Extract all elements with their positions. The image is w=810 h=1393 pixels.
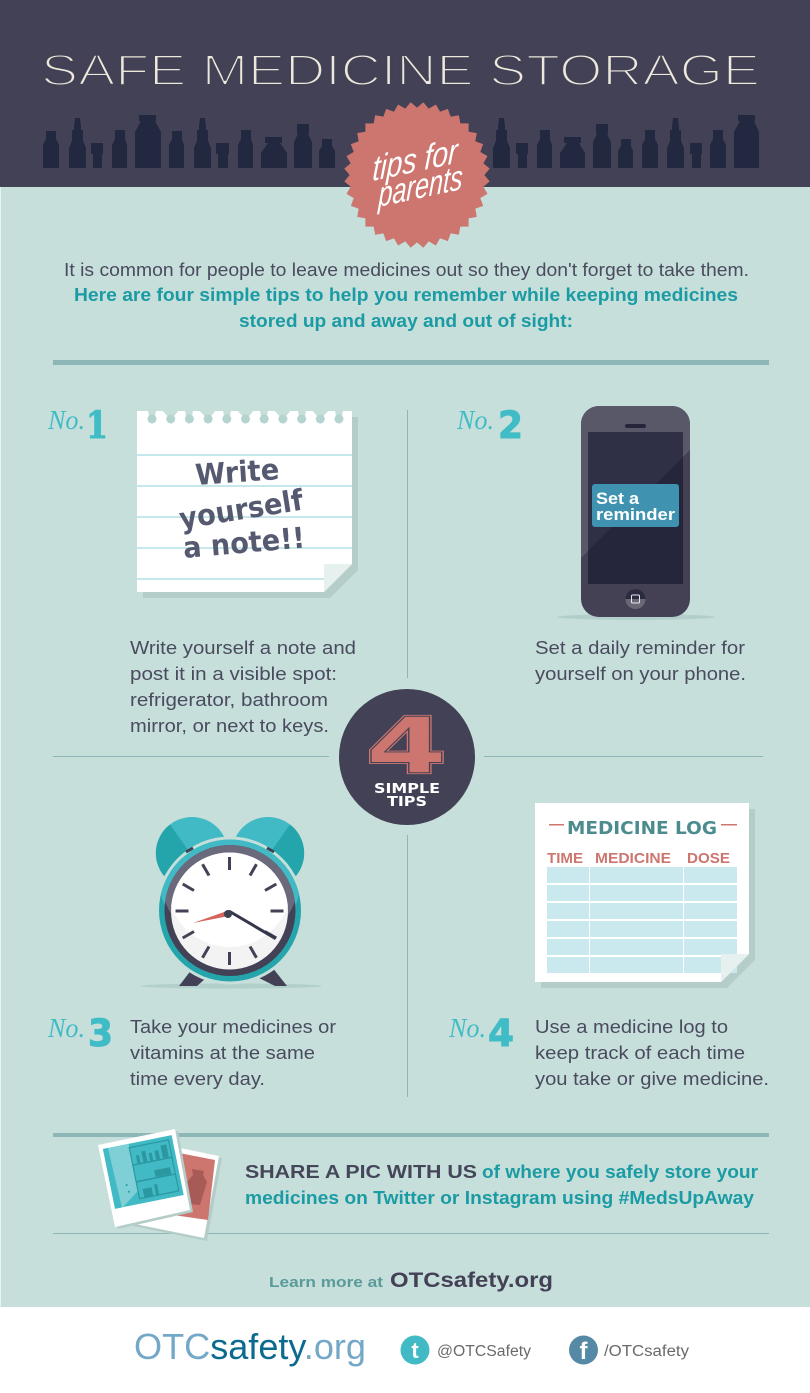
- tip 4 number: [448, 1012, 514, 1055]
- tip 2 text: yourself on your phone.: [535, 664, 746, 684]
- tip 4 text: keep track of each time: [535, 1043, 745, 1063]
- handwritten note text: Write: [194, 452, 280, 492]
- handwritten note text: yourself: [177, 483, 306, 536]
- tip 4 text: you take or give medicine.: [535, 1069, 769, 1089]
- learn more line: [269, 1269, 553, 1292]
- badge: 4 simple tips: 4: [366, 702, 447, 792]
- share call to action: SHARE A PIC WITH US: [245, 1162, 477, 1182]
- tip 1 text: refrigerator, bathroom: [130, 690, 328, 710]
- icon: sticky note: [137, 410, 358, 598]
- badge: tips for parents: tips for: [372, 130, 461, 189]
- badge: 4 simple tips: 4: [366, 702, 447, 792]
- handwritten note text: a note!!: [182, 520, 306, 565]
- tip 1 text: [130, 638, 356, 736]
- tip 2 number: 2: [498, 404, 523, 447]
- reminder button: Set a: [596, 489, 640, 508]
- handwritten note text: [177, 452, 306, 565]
- log columns: TIME: [547, 850, 583, 867]
- badge: tips for parents: [344, 102, 490, 248]
- tip 1 text: post it in a visible spot:: [130, 664, 337, 684]
- reminder button: reminder: [596, 505, 675, 524]
- tip 2 number: No.: [456, 405, 494, 435]
- log columns: DOSE: [687, 850, 730, 867]
- badge: tips for parents: parents: [377, 157, 464, 215]
- tip 1 text: mirror, or next to keys.: [130, 716, 329, 736]
- badge: 4 simple tips: SIMPLE: [374, 782, 440, 797]
- learn more line: OTCsafety.org: [390, 1269, 553, 1292]
- footer: [0, 1307, 810, 1393]
- learn more line: Learn more at: [269, 1274, 383, 1291]
- intro text: Here are four simple tips to help you remember while keeping medicines: [74, 285, 738, 305]
- facebook handle: /OTCsafety: [604, 1343, 689, 1360]
- log title: MEDICINE LOG: [567, 818, 717, 839]
- log columns: MEDICINE: [595, 850, 671, 867]
- tip 2 text: [535, 638, 746, 684]
- tip 4 text: [535, 1017, 769, 1089]
- tip 2 number: [456, 404, 523, 447]
- tip 2 text: Set a daily reminder for: [535, 638, 745, 658]
- tip 3 number: 3: [88, 1012, 113, 1055]
- icon: twitter: t: [411, 1338, 419, 1363]
- tip 3 text: time every day.: [130, 1069, 265, 1089]
- title: SAFE MEDICINE STORAGE: [41, 46, 760, 95]
- tip 3 text: vitamins at the same: [130, 1043, 315, 1063]
- icon: smartphone: [557, 406, 715, 620]
- share call to action: [245, 1162, 758, 1208]
- icon: facebook: f: [580, 1338, 588, 1365]
- intro text: stored up and away and out of sight:: [239, 311, 573, 331]
- bottle silhouettes: [43, 115, 759, 168]
- icon: medicine log: [535, 803, 755, 988]
- twitter handle: @OTCSafety: [437, 1343, 531, 1360]
- share call to action: medicines on Twitter or Instagram using #MedsUpAway: [245, 1188, 754, 1208]
- tip 3 text: [130, 1017, 336, 1089]
- icon: alarm clock: [140, 807, 322, 988]
- reminder button: [592, 484, 679, 527]
- tip 4 number: 4: [488, 1012, 514, 1055]
- tip 1 text: Write yourself a note and: [130, 638, 356, 658]
- tip 3 number: No.: [47, 1013, 85, 1043]
- tip 1 number: [47, 403, 108, 447]
- tip 1 number: 1: [86, 403, 108, 447]
- share call to action: of where you safely store your: [482, 1162, 758, 1182]
- intro text: It is common for people to leave medicines out so they don't forget to take them.: [64, 260, 749, 280]
- icon: photos: [98, 1129, 222, 1241]
- tip 3 number: [47, 1012, 113, 1055]
- log columns: [547, 850, 730, 867]
- icon: twitter: [400, 1336, 430, 1364]
- tip 1 number: No.: [47, 405, 85, 435]
- tip 4 text: Use a medicine log to: [535, 1017, 728, 1037]
- logo: OTCsafety.org: [134, 1326, 366, 1367]
- intro text: [64, 260, 749, 331]
- icon: facebook: [569, 1336, 598, 1365]
- tip 4 number: No.: [448, 1013, 486, 1043]
- badge: 4 simple tips: TIPS: [387, 795, 427, 810]
- header band: [0, 0, 810, 187]
- badge: 4 simple tips: [339, 689, 475, 825]
- tip 3 text: Take your medicines or: [130, 1017, 336, 1037]
